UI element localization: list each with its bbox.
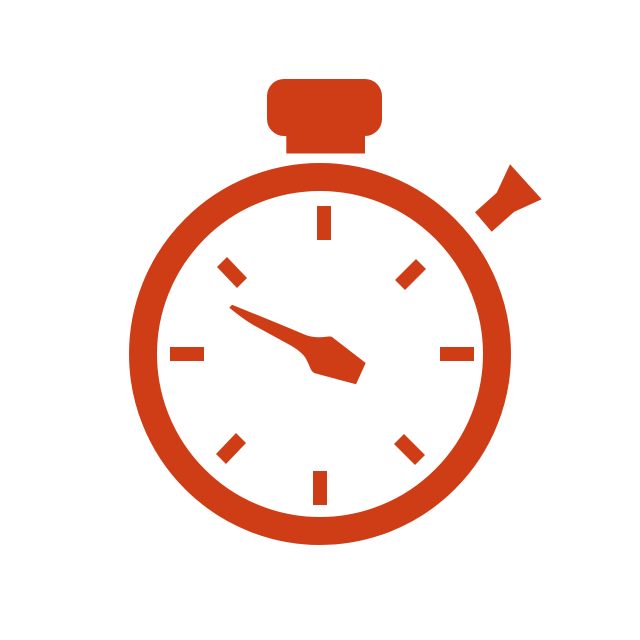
watch case ring: [143, 177, 497, 531]
hour tick marks: [170, 206, 474, 505]
clock hand: [229, 305, 366, 384]
side pusher: [475, 164, 542, 232]
stopwatch crown button: [267, 79, 382, 154]
